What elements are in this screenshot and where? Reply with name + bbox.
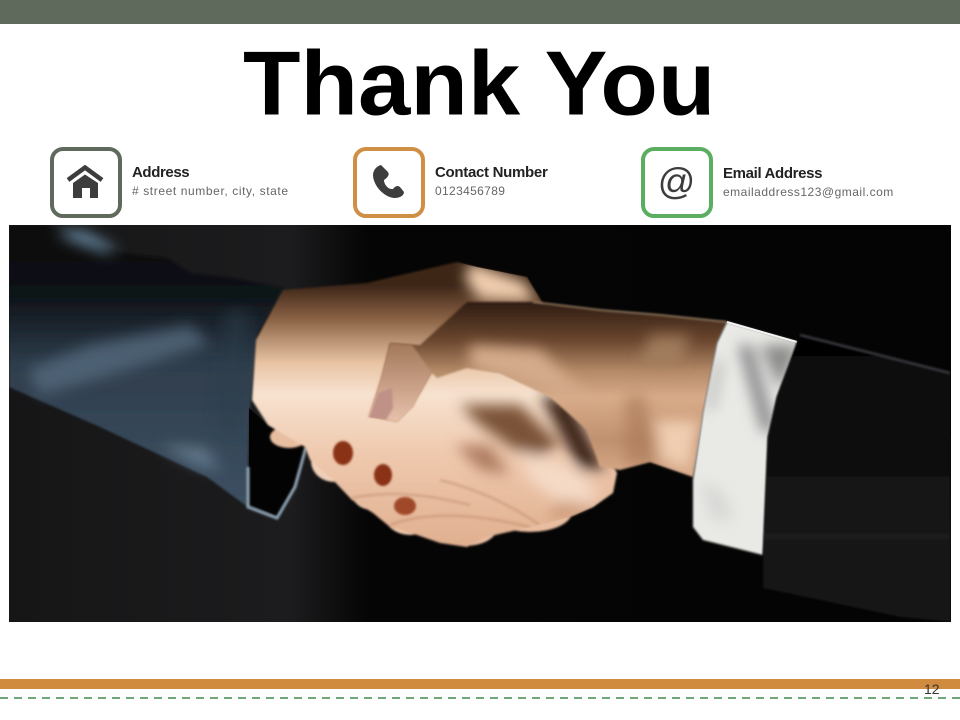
contact: address <box>50 147 289 218</box>
finger divisions <box>352 480 540 527</box>
right hand and thumb <box>368 302 727 477</box>
shirt cuff <box>693 322 800 555</box>
photo background <box>9 225 951 622</box>
phone number text: 0123456789 <box>435 184 505 198</box>
right sleeve <box>763 335 951 622</box>
icon: house <box>50 147 122 218</box>
left hand and fingers <box>252 262 617 547</box>
address text: # street number, city, state <box>132 184 289 198</box>
icon: at sign: @ <box>658 161 695 202</box>
sleeve highlights <box>28 230 250 470</box>
address heading: Address <box>132 164 189 181</box>
thumb <box>368 343 432 422</box>
bottom orange bar <box>0 679 960 689</box>
fingernails <box>333 441 416 515</box>
title: Thank You <box>243 34 715 134</box>
contact number heading: Contact Number <box>435 164 547 181</box>
sleeve cuff edge <box>248 447 306 518</box>
icon: at sign <box>641 147 713 218</box>
email heading: Email Address <box>723 165 822 182</box>
photo: handshake <box>9 225 951 622</box>
contact: phone <box>353 147 548 218</box>
icon: phone <box>353 147 425 218</box>
email text: emailaddress123@gmail.com <box>723 185 894 199</box>
page number: 12 <box>924 681 940 697</box>
thumbnail <box>369 388 393 420</box>
sleeve opening <box>249 408 307 516</box>
left sleeve <box>9 225 307 518</box>
top bar <box>0 0 960 24</box>
dashed green line <box>0 697 960 699</box>
hand top edge <box>533 302 727 322</box>
contact: email <box>641 147 894 218</box>
